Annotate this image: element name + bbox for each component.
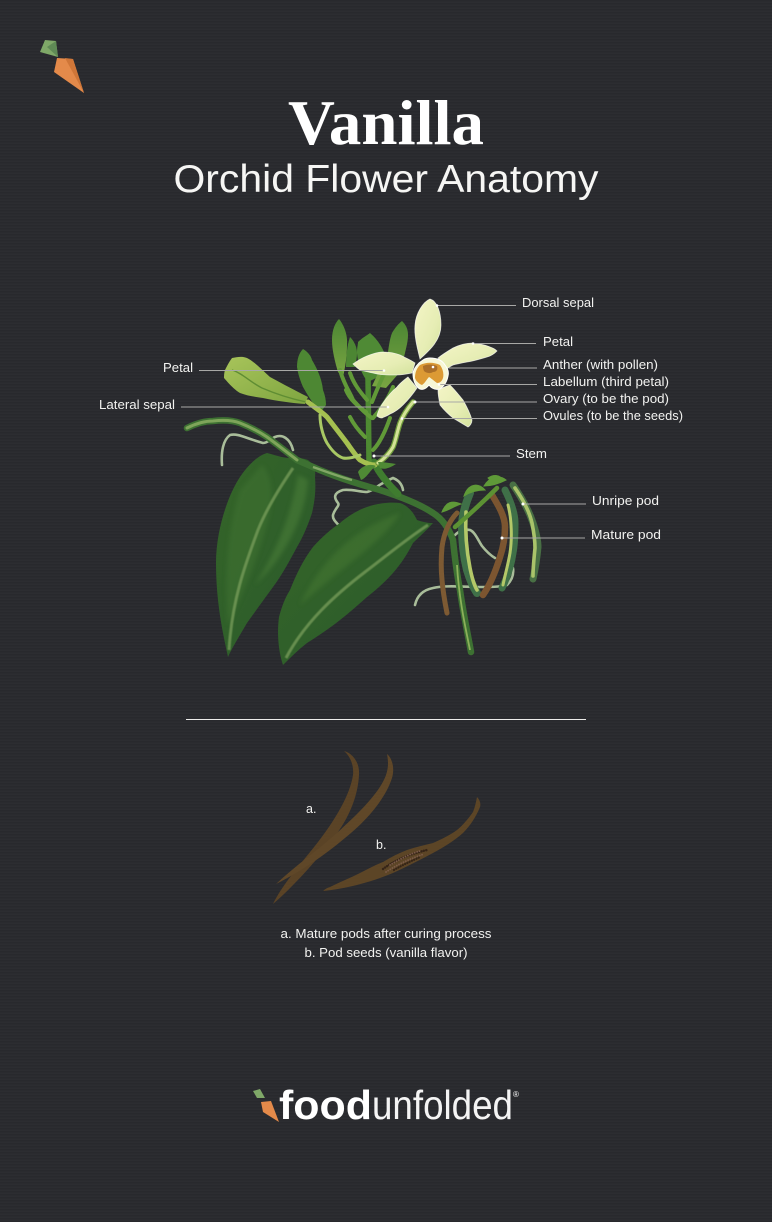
callout: Unripe pod: Unripe pod (592, 494, 659, 508)
title: Vanilla (288, 87, 484, 158)
logo: foodunfolded: ® (513, 1090, 519, 1099)
callout: Dorsal sepal: Dorsal sepal (522, 296, 594, 310)
flower stalk (374, 462, 398, 494)
pods (441, 485, 538, 613)
leaf right (278, 503, 433, 665)
caption: b. Pod seeds (vanilla flavor) (304, 946, 468, 960)
label: b.: b. (376, 838, 386, 852)
callout: Stem: Stem (516, 447, 547, 461)
illustration: vanilla plant (187, 299, 538, 665)
central stem and branches (308, 370, 413, 465)
callout: Labellum: Labellum (third petal) (543, 375, 669, 389)
flower petals (353, 299, 497, 427)
caption: a. Mature pods after curing process (280, 927, 492, 941)
callout: Ovary (414, 392, 669, 406)
callout: Mature pod: Mature pod (591, 528, 661, 542)
pod cluster bracts (442, 476, 506, 512)
callout: Ovules: Ovules (to be the seeds) (543, 409, 683, 423)
illustration: cured pods a (273, 751, 393, 904)
main stem (187, 420, 471, 652)
callout: Stem (372, 447, 547, 461)
caption (280, 927, 492, 960)
small bracts (358, 462, 396, 480)
logo: foodunfolded: food (279, 1082, 372, 1128)
callout: Petal right (472, 335, 573, 349)
callout: Ovary: Ovary (to be the pod) (543, 392, 669, 406)
illustration: split pod b (323, 797, 480, 891)
labellum (413, 358, 448, 389)
title (174, 87, 599, 201)
sepals behind flower (332, 319, 347, 377)
logo: foodunfolded: unfolded (372, 1082, 513, 1128)
icon: carrot (40, 40, 84, 93)
leaf left (216, 453, 315, 657)
callout: Unripe pod (522, 494, 659, 508)
label: a.: a. (306, 802, 316, 816)
bud large (224, 357, 308, 404)
callout: Anther: Anther (with pollen) (543, 358, 658, 372)
callout: Lateral sepal: Lateral sepal (99, 398, 175, 412)
callout: Petal left: Petal (163, 361, 193, 375)
aerial roots (222, 435, 513, 605)
callout: Petal right: Petal (543, 335, 573, 349)
callout: Mature pod (500, 528, 661, 542)
divider (186, 718, 586, 720)
title: Orchid Flower Anatomy (174, 158, 599, 201)
logo: foodunfolded (253, 1082, 519, 1128)
